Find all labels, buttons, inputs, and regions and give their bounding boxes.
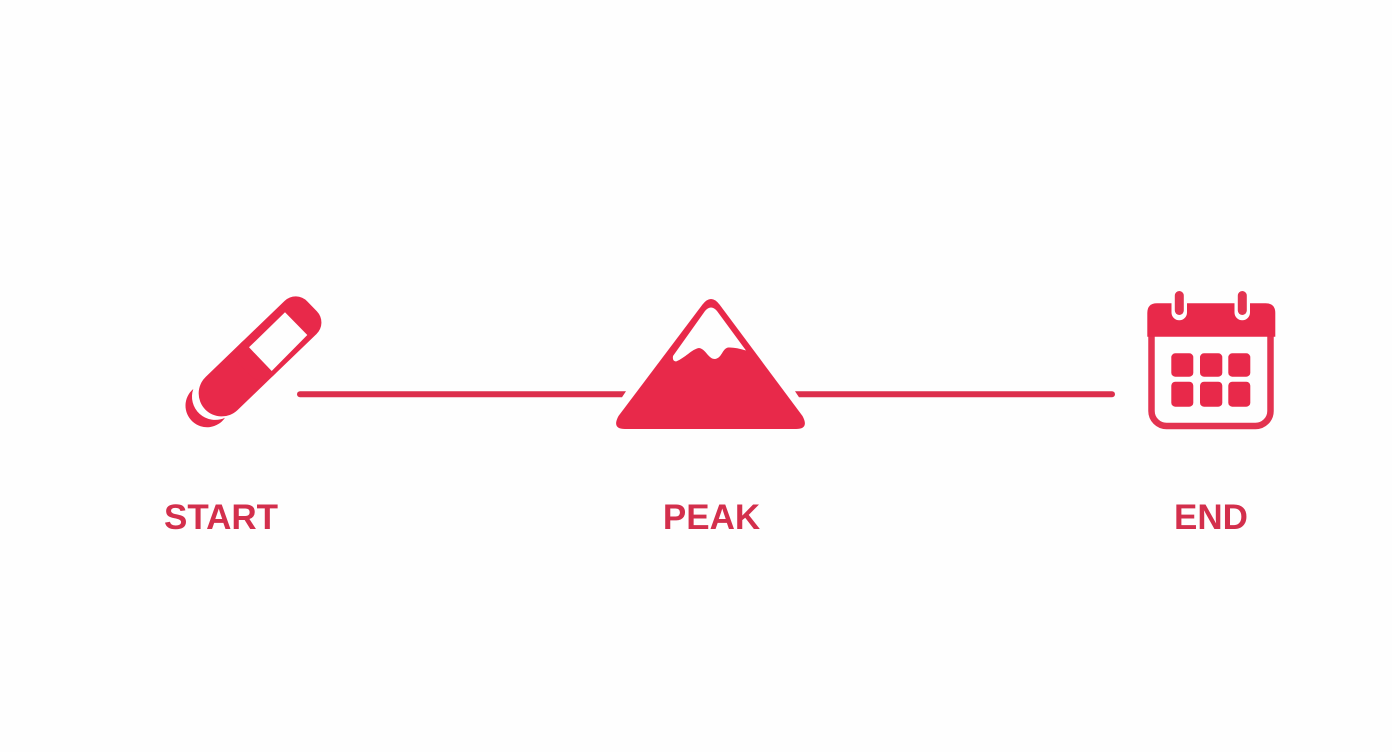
- calendar date cells: [1171, 353, 1250, 407]
- label: end: END: [1174, 498, 1248, 537]
- label: peak: PEAK: [663, 498, 760, 537]
- calendar ring: right: [1234, 291, 1250, 320]
- icon: calendar: [1147, 291, 1275, 426]
- icon: mountain peak: [616, 299, 805, 429]
- calendar ring: left: [1172, 291, 1187, 320]
- connector line: peak to end: [795, 391, 1115, 397]
- connector line: start to peak: [297, 391, 626, 397]
- icon: bandage pill: [185, 290, 328, 427]
- label: start: START: [164, 498, 278, 537]
